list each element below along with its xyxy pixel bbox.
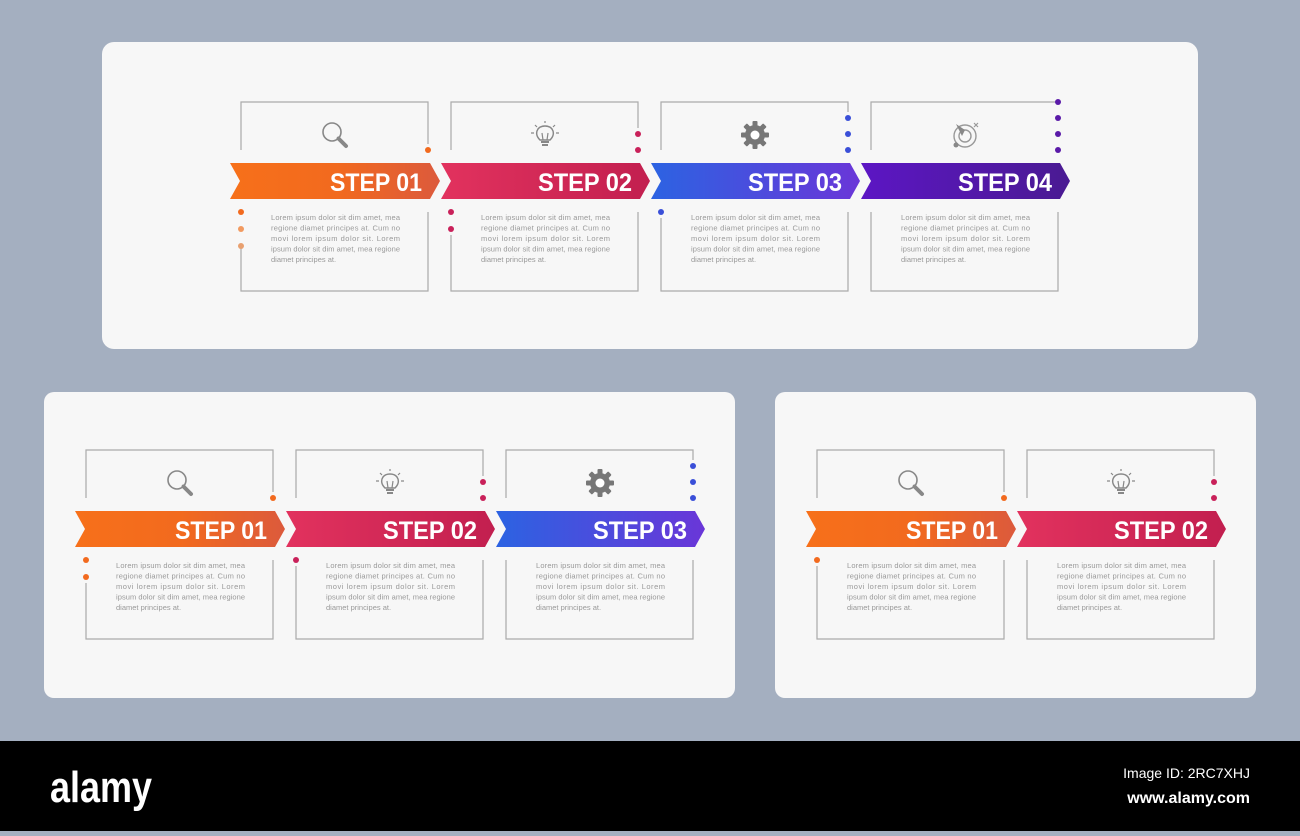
step 04 (panel 1): diamet principes at. [901,255,966,264]
step 02 (panel 3): ipsum dolor sit dim amet, mea regione [1057,592,1186,602]
step 03 (panel 2) [496,450,705,639]
footer bar [0,741,1300,831]
step 03 (panel 1): movi lorem ipsum dolor sit. Lorem [691,234,820,243]
step 04 (panel 1): regione diamet principes at. Cum no [901,224,1030,232]
step 01 (panel 1): ipsum dolor sit dim amet, mea regione [271,244,400,254]
step 01 (panel 3) [806,450,1016,639]
step 01 (panel 3): movi lorem ipsum dolor sit. Lorem [847,582,976,591]
step 01 (panel 2): regione diamet principes at. Cum no [116,572,245,580]
step 01 (panel 1): diamet principes at. [271,255,336,264]
step 03 (panel 2): diamet principes at. [536,603,601,612]
step 01 (panel 2): ipsum dolor sit dim amet, mea regione [116,592,245,602]
step 02 (panel 2): movi lorem ipsum dolor sit. Lorem [326,582,455,591]
step 02 (panel 1) [441,102,650,291]
step 01 (panel 2): STEP 01 [175,517,267,545]
step 01 (panel 1): STEP 01 [330,169,422,197]
step 02 (panel 2): STEP 02 [383,517,477,545]
footer logo: alamy [50,763,152,812]
step 03 (panel 2): movi lorem ipsum dolor sit. Lorem [536,582,665,591]
step 02 (panel 1): Lorem ipsum dolor sit dim amet, mea [481,213,611,222]
step 01 (panel 1): regione diamet principes at. Cum no [271,224,400,232]
panel: four steps [102,42,1198,349]
step 02 (panel 3): diamet principes at. [1057,603,1122,612]
step 04 (panel 1): ipsum dolor sit dim amet, mea regione [901,244,1030,254]
step 04 (panel 1): movi lorem ipsum dolor sit. Lorem [901,234,1030,243]
step 01 (panel 3): Lorem ipsum dolor sit dim amet, mea [847,561,977,570]
step 02 (panel 1): diamet principes at. [481,255,546,264]
step 02 (panel 1): ipsum dolor sit dim amet, mea regione [481,244,610,254]
step 03 (panel 1): regione diamet principes at. Cum no [691,224,820,232]
step 02 (panel 2) [286,450,495,639]
step 03 (panel 2): STEP 03 [593,517,687,545]
step 01 (panel 2): Lorem ipsum dolor sit dim amet, mea [116,561,246,570]
step 02 (panel 3): STEP 02 [1114,517,1208,545]
step 01 (panel 3): diamet principes at. [847,603,912,612]
step 03 (panel 1): diamet principes at. [691,255,756,264]
step 02 (panel 1): regione diamet principes at. Cum no [481,224,610,232]
step 02 (panel 3) [1017,450,1226,639]
step 03 (panel 1): STEP 03 [748,169,842,197]
step 01 (panel 1): Lorem ipsum dolor sit dim amet, mea [271,213,401,222]
step 02 (panel 2): regione diamet principes at. Cum no [326,572,455,580]
step 04 (panel 1) [861,99,1070,291]
step 02 (panel 2): Lorem ipsum dolor sit dim amet, mea [326,561,456,570]
footer image id: Image ID: 2RC7XHJ [1123,765,1250,781]
step 02 (panel 1): movi lorem ipsum dolor sit. Lorem [481,234,610,243]
step 02 (panel 1): STEP 02 [538,169,632,197]
step 02 (panel 3): Lorem ipsum dolor sit dim amet, mea [1057,561,1187,570]
step 04 (panel 1): STEP 04 [958,169,1052,197]
footer url: www.alamy.com [1126,790,1250,807]
step 03 (panel 1) [651,102,860,291]
step 01 (panel 2): diamet principes at. [116,603,181,612]
panel: three steps [44,392,735,698]
step 02 (panel 2): diamet principes at. [326,603,391,612]
step 02 (panel 2): ipsum dolor sit dim amet, mea regione [326,592,455,602]
step 01 (panel 1) [230,102,440,291]
step 03 (panel 2): ipsum dolor sit dim amet, mea regione [536,592,665,602]
step 01 (panel 2): movi lorem ipsum dolor sit. Lorem [116,582,245,591]
step 02 (panel 3): regione diamet principes at. Cum no [1057,572,1186,580]
step 02 (panel 3): movi lorem ipsum dolor sit. Lorem [1057,582,1186,591]
step 01 (panel 1): movi lorem ipsum dolor sit. Lorem [271,234,400,243]
step 04 (panel 1): Lorem ipsum dolor sit dim amet, mea [901,213,1031,222]
step 03 (panel 1): Lorem ipsum dolor sit dim amet, mea [691,213,821,222]
panel: two steps [775,392,1256,698]
step 03 (panel 2): Lorem ipsum dolor sit dim amet, mea [536,561,666,570]
step 01 (panel 2) [75,450,285,639]
step 03 (panel 2): regione diamet principes at. Cum no [536,572,665,580]
step 01 (panel 3): STEP 01 [906,517,998,545]
step 03 (panel 1): ipsum dolor sit dim amet, mea regione [691,244,820,254]
step 01 (panel 3): regione diamet principes at. Cum no [847,572,976,580]
step 01 (panel 3): ipsum dolor sit dim amet, mea regione [847,592,976,602]
